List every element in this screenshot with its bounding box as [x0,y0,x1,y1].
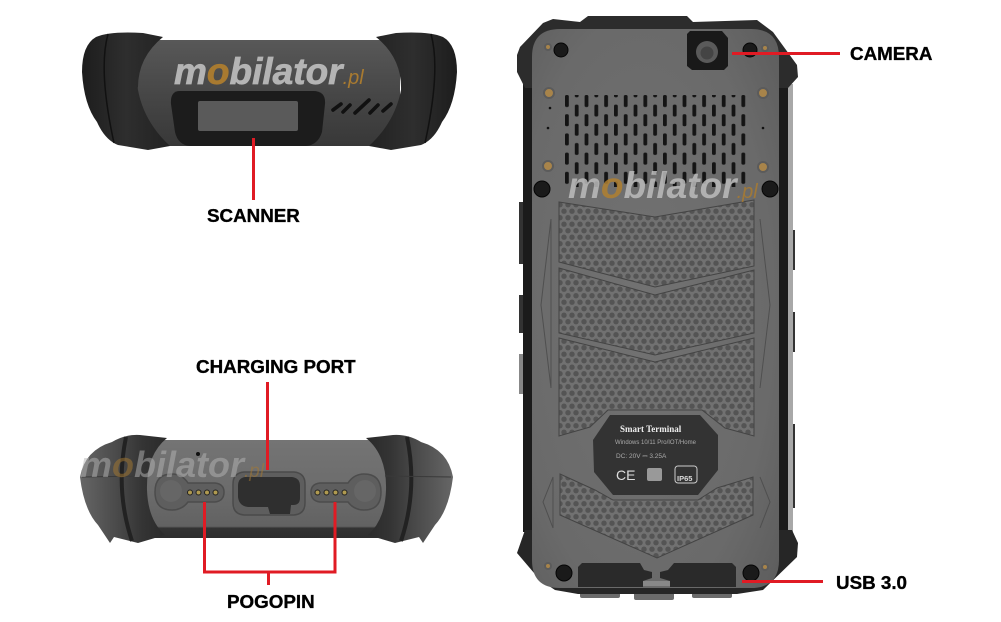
left bumper [80,435,167,543]
side frame [523,84,793,532]
leader line: scanner [252,138,255,200]
USB port covers [578,563,736,587]
IP65 badge: IP65 [677,474,692,483]
watermark logo: mobilator.pl [174,51,364,92]
left bumper [82,32,170,150]
side buttons [519,202,795,508]
leader bracket: pogopin [204,502,335,585]
device top view: scanner end [82,32,457,150]
side chevrons [541,219,770,528]
textured grip panels [559,200,754,558]
camera module [687,31,728,70]
microphone hole [196,452,200,456]
device body [140,440,394,538]
screws [534,43,778,581]
right bumper [369,32,457,150]
device back view [517,16,798,600]
back plate [532,29,779,588]
right pogo pin mount [311,474,381,510]
leader line: charging port [266,382,269,470]
scanner window [171,91,325,146]
label spec lines: Windows 10/11 Pro/IOT/Home [615,440,697,446]
label: camera: CAMERA [850,43,933,64]
vent slots [333,100,391,113]
speaker grille [565,95,748,187]
left pogo pin mount [155,474,224,510]
gold posts [543,44,768,570]
small holes [547,107,764,129]
right bumper [366,435,453,543]
recycling mark [647,468,662,481]
device body [138,40,400,146]
label power rating: DC: 20V ⎓ 3.25A [616,453,667,460]
rating label [593,415,718,495]
leader line: camera [732,52,840,55]
device bottom view: connector end [80,435,453,543]
bottom housing bumper [517,530,798,594]
watermark logo: mobilator.pl [80,444,265,485]
label: charging port: CHARGING PORT [196,356,356,377]
label: USB 3.0: USB 3.0 [836,572,907,593]
bottom buttons [580,590,732,600]
leader line: USB 3.0 [742,580,823,583]
CE mark: CE [616,467,635,483]
label: pogopin: POGOPIN [227,591,315,612]
charging port cover [233,472,305,515]
label: scanner: SCANNER [207,205,300,226]
top housing bumper [517,16,798,88]
watermark logo: mobilator.pl [568,165,758,206]
label title: Smart Terminal [620,424,682,434]
